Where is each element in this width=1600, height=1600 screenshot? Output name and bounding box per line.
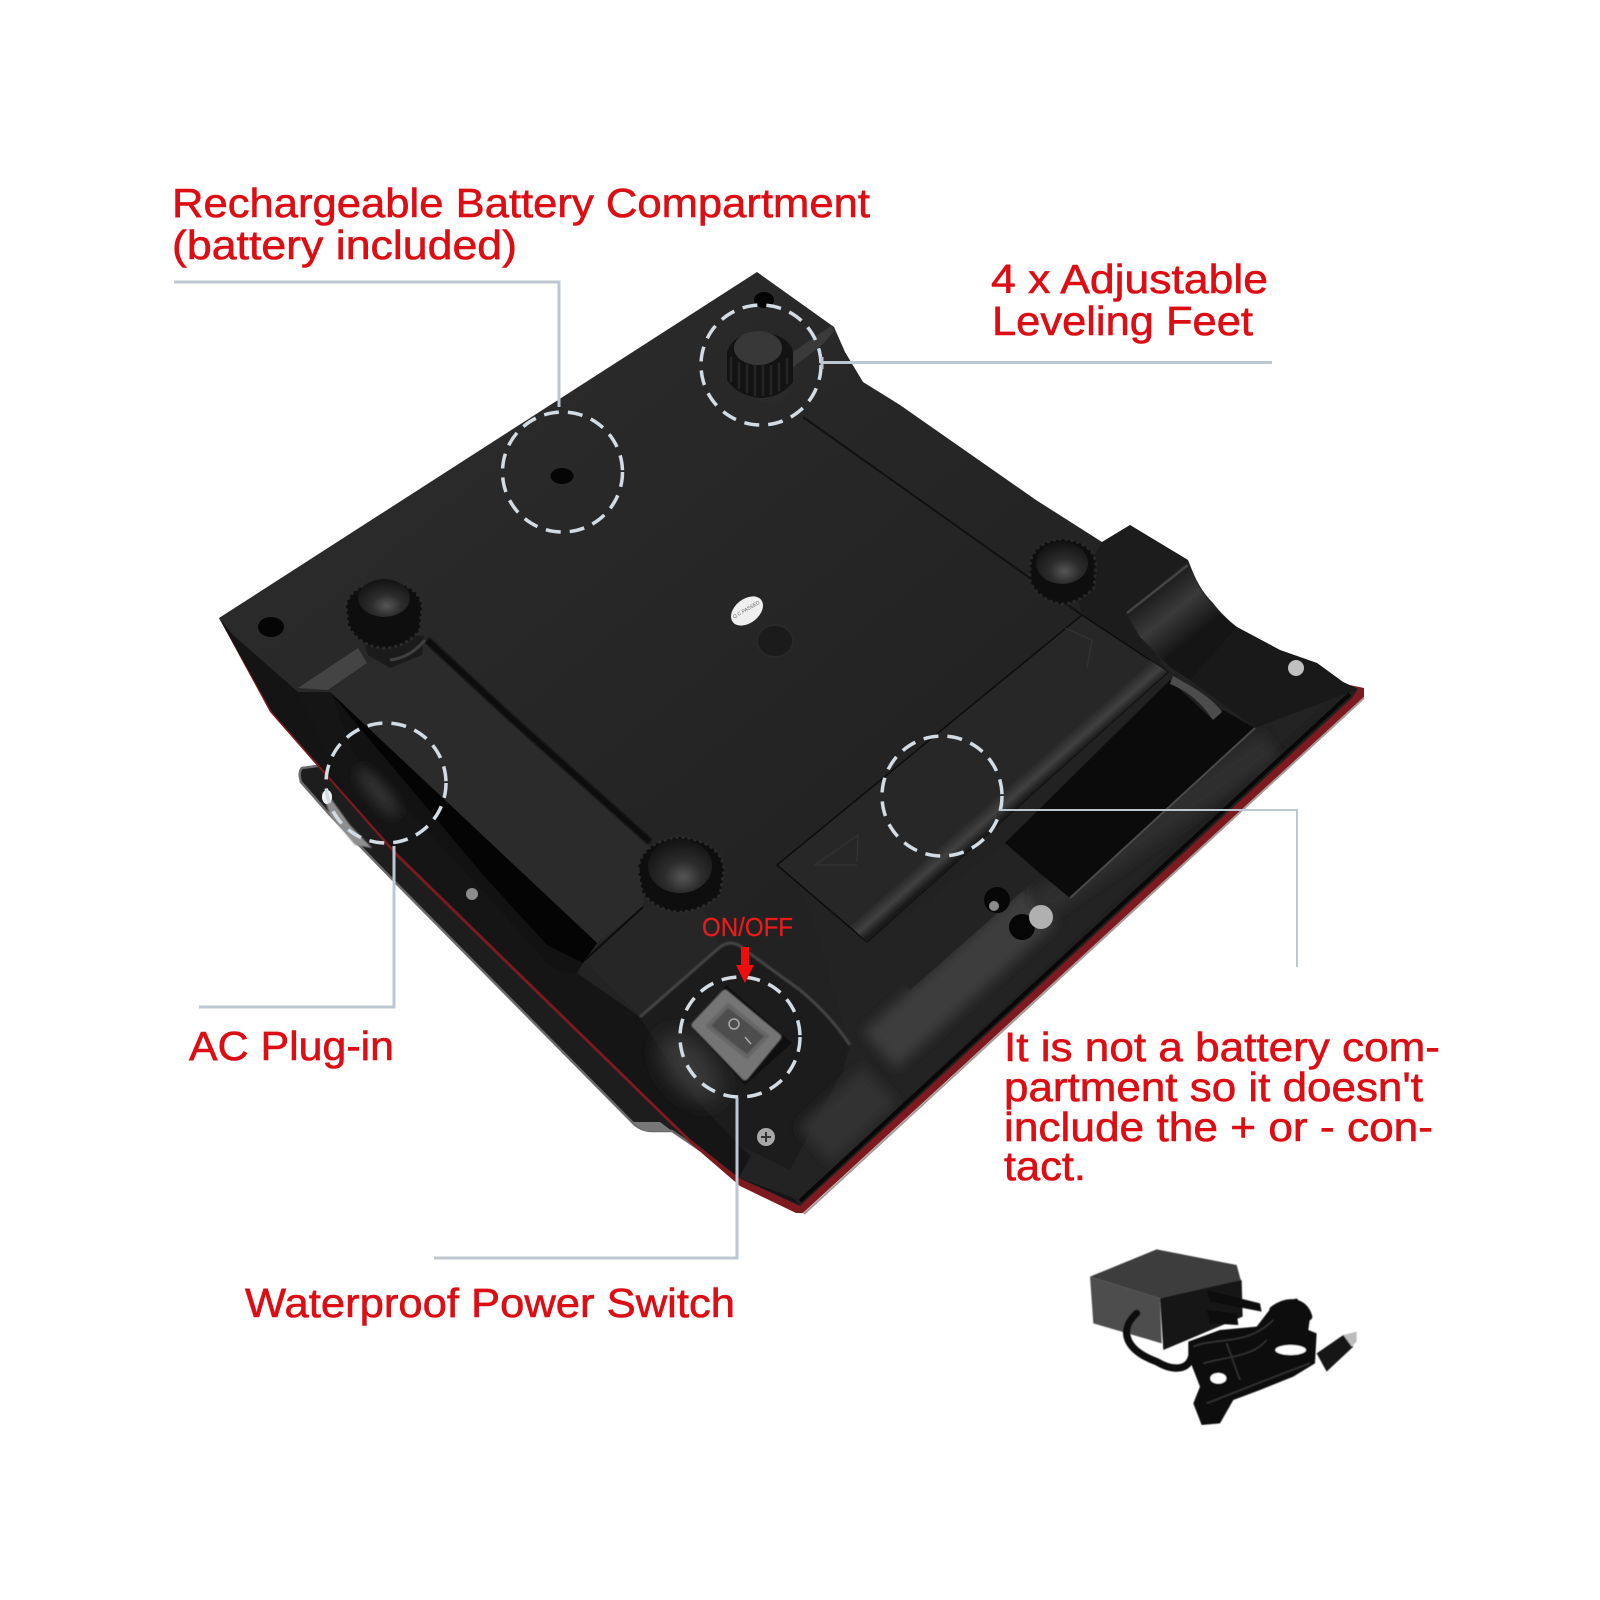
- lit rim band: [880, 905, 1040, 1050]
- label: waterproof power switch: Waterproof Power Switch: [245, 1280, 735, 1326]
- label: rechargeable battery compartment: (battery included): [172, 222, 517, 268]
- smudge highlight inside recess: [356, 768, 400, 816]
- AC adapter with coiled cable: [1090, 1249, 1357, 1425]
- lit patch left of switch: [654, 1032, 723, 1106]
- battery recess: [1005, 680, 1255, 898]
- lower left outer band: [298, 692, 800, 1205]
- compartment cover: [777, 615, 1168, 942]
- black along right corner: [1190, 627, 1358, 728]
- waterproof rocker switch: [694, 985, 792, 1085]
- black inner edge: [800, 694, 1350, 1201]
- label: leveling feet: 4 x Adjustable: [991, 256, 1268, 302]
- cover engraved triangles: [815, 628, 1092, 865]
- block corner line: [585, 907, 643, 960]
- lower right dark wedge: [739, 1156, 792, 1197]
- hole: top corner: [754, 292, 774, 308]
- leader line: cover note: [999, 810, 1297, 967]
- label: rechargeable battery compartment: [172, 180, 871, 268]
- plate surface: [200, 260, 1380, 1220]
- recess light edge: [1070, 728, 1255, 898]
- silver base plate behind the unit: [300, 765, 700, 1150]
- upper right block: [1102, 525, 1188, 560]
- label: compartment note: include the + or - con-: [1004, 1104, 1433, 1150]
- foot: bottom: [638, 837, 724, 912]
- foot: right: [1030, 539, 1096, 604]
- step strip near left foot: [298, 648, 367, 690]
- hole: left corner: [258, 617, 284, 637]
- foot: left: [346, 579, 425, 668]
- label: leveling feet: [991, 256, 1268, 344]
- right of block step: [585, 900, 720, 1017]
- groove: [427, 640, 650, 842]
- label: rechargeable battery compartment: Rechargeable Battery Compartment: [172, 180, 871, 226]
- dashed circle: compartment cover: [882, 736, 1002, 856]
- main device body: [200, 260, 1380, 1220]
- charging terminal screw: [1009, 905, 1053, 940]
- foot plate edge line: [803, 417, 1082, 615]
- left recess deep: [330, 692, 597, 963]
- label: compartment note: [1004, 1024, 1440, 1189]
- dashed circle: power switch: [680, 977, 800, 1097]
- screw: bottom rim: [757, 1128, 775, 1146]
- switch surround ridge: [640, 943, 850, 1045]
- red casing edge: [219, 618, 1364, 1214]
- dashed circle: battery compartment: [502, 412, 622, 532]
- QC sticker: Q.C.PASSED: [732, 600, 761, 620]
- label: leveling feet: Leveling Feet: [992, 298, 1254, 344]
- leader line: leveling feet: [822, 357, 1272, 369]
- curved lip highlight: [1170, 676, 1222, 720]
- switch surround: [640, 943, 850, 1170]
- handle block surface: [330, 640, 650, 943]
- foot: top: [727, 326, 834, 404]
- lip line: [1127, 565, 1188, 613]
- label: compartment note: tact.: [1004, 1143, 1086, 1189]
- embossed button: [757, 625, 793, 657]
- label: compartment note: It is not a battery com-: [1004, 1024, 1440, 1070]
- QC sticker: [725, 590, 769, 632]
- rim band upper: [1040, 745, 1270, 905]
- plateau beside battery cover: [867, 843, 1043, 990]
- lit lower edge of cover: [850, 660, 1168, 942]
- hole: battery compartment marker: [550, 468, 574, 484]
- label: AC plug-in: AC Plug-in: [189, 1023, 394, 1069]
- leader line: AC plug: [199, 846, 394, 1007]
- label: compartment note: partment so it doesn't: [1004, 1064, 1424, 1110]
- screw: left rim: [466, 888, 478, 900]
- leader line: power switch: [434, 1098, 737, 1258]
- leader line: battery compartment: [174, 282, 559, 407]
- label: ON/OFF: ON/OFF: [702, 912, 793, 942]
- screw: recessed: [984, 887, 1010, 913]
- dashed circle: AC plug: [326, 723, 446, 843]
- rim band lower: [815, 1085, 880, 1145]
- screw: right corner: [1288, 660, 1304, 676]
- left recess outer: [330, 692, 597, 973]
- upper right lit curve surface: [1130, 578, 1237, 680]
- arrow: ON/OFF pointer: [736, 947, 754, 983]
- dashed circle: leveling foot: [701, 305, 821, 425]
- left chamfer face: [219, 618, 397, 853]
